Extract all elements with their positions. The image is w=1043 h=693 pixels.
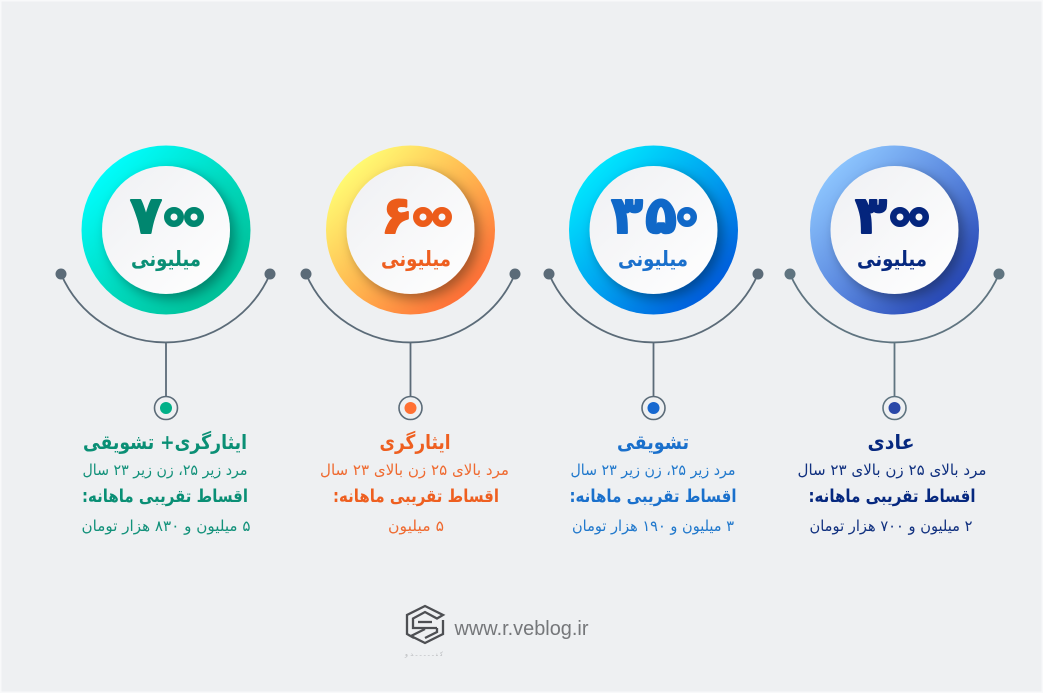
right dot — [752, 268, 764, 280]
logo small label: کنـــــدو — [404, 651, 443, 658]
white disc 350 — [590, 166, 718, 294]
eligibility: مرد بالای ۲۵ زن بالای ۲۳ سال — [798, 461, 986, 479]
gradient ring 600 — [326, 146, 495, 314]
marker — [642, 396, 665, 420]
arc connector — [306, 274, 515, 397]
title: عادی — [868, 430, 914, 454]
right dot — [264, 268, 276, 280]
column: ایثارگری — [300, 146, 520, 535]
column: تشویقی — [544, 146, 764, 535]
instalment heading: اقساط تقریبی ماهانه: — [570, 487, 736, 507]
left dot — [784, 268, 796, 280]
instalment heading: اقساط تقریبی ماهانه: — [333, 487, 499, 507]
white disc 300 — [830, 166, 958, 294]
website url: www.r.veblog.ir — [454, 618, 589, 640]
marker — [154, 396, 178, 420]
arc connector — [61, 274, 270, 397]
white disc 600 — [346, 166, 474, 294]
gradient ring 700 — [82, 146, 250, 314]
left dot — [300, 268, 312, 280]
gradient ring 350 — [569, 146, 738, 314]
logo — [404, 606, 589, 658]
instalment heading: اقساط تقریبی ماهانه: — [808, 487, 976, 507]
title: تشویقی — [617, 430, 689, 454]
left dot — [544, 268, 554, 280]
number 350: ۳۵۰ — [611, 186, 703, 246]
marker — [883, 396, 906, 420]
instalment value: ۵ میلیون و ۸۳۰ هزار تومان — [82, 517, 250, 535]
gradient ring 300 — [810, 146, 979, 314]
icon: hexagon mark — [407, 606, 443, 643]
unit label: میلیونی — [618, 247, 688, 271]
eligibility: مرد زیر ۲۵، زن زیر ۲۳ سال — [570, 461, 736, 479]
column: عادی — [784, 146, 1004, 535]
title: ایثارگری+ تشویقی — [83, 430, 247, 454]
white disc 700 — [102, 166, 230, 294]
instalment value: ۲ میلیون و ۷۰۰ هزار تومان — [810, 517, 972, 535]
instalment value: ۵ میلیون — [388, 517, 444, 535]
column: ایثارگری + تشویقی — [56, 146, 276, 535]
arc connector — [790, 274, 999, 397]
left dot — [56, 268, 66, 280]
unit label: میلیونی — [381, 247, 451, 271]
unit label: میلیونی — [857, 247, 927, 271]
number 600: ۶۰۰ — [381, 186, 458, 246]
arc connector — [549, 274, 758, 397]
eligibility: مرد زیر ۲۵، زن زیر ۲۳ سال — [82, 461, 247, 479]
right dot — [994, 268, 1004, 280]
instalment heading: اقساط تقریبی ماهانه: — [82, 487, 248, 507]
unit label: میلیونی — [131, 247, 201, 271]
instalment value: ۳ میلیون و ۱۹۰ هزار تومان — [572, 517, 734, 535]
eligibility: مرد بالای ۲۵ زن بالای ۲۳ سال — [320, 461, 509, 479]
title: ایثارگری — [380, 430, 450, 454]
number 300: ۳۰۰ — [855, 186, 935, 246]
number 700: ۷۰۰ — [130, 186, 210, 246]
marker — [399, 396, 422, 420]
right dot — [510, 268, 520, 280]
